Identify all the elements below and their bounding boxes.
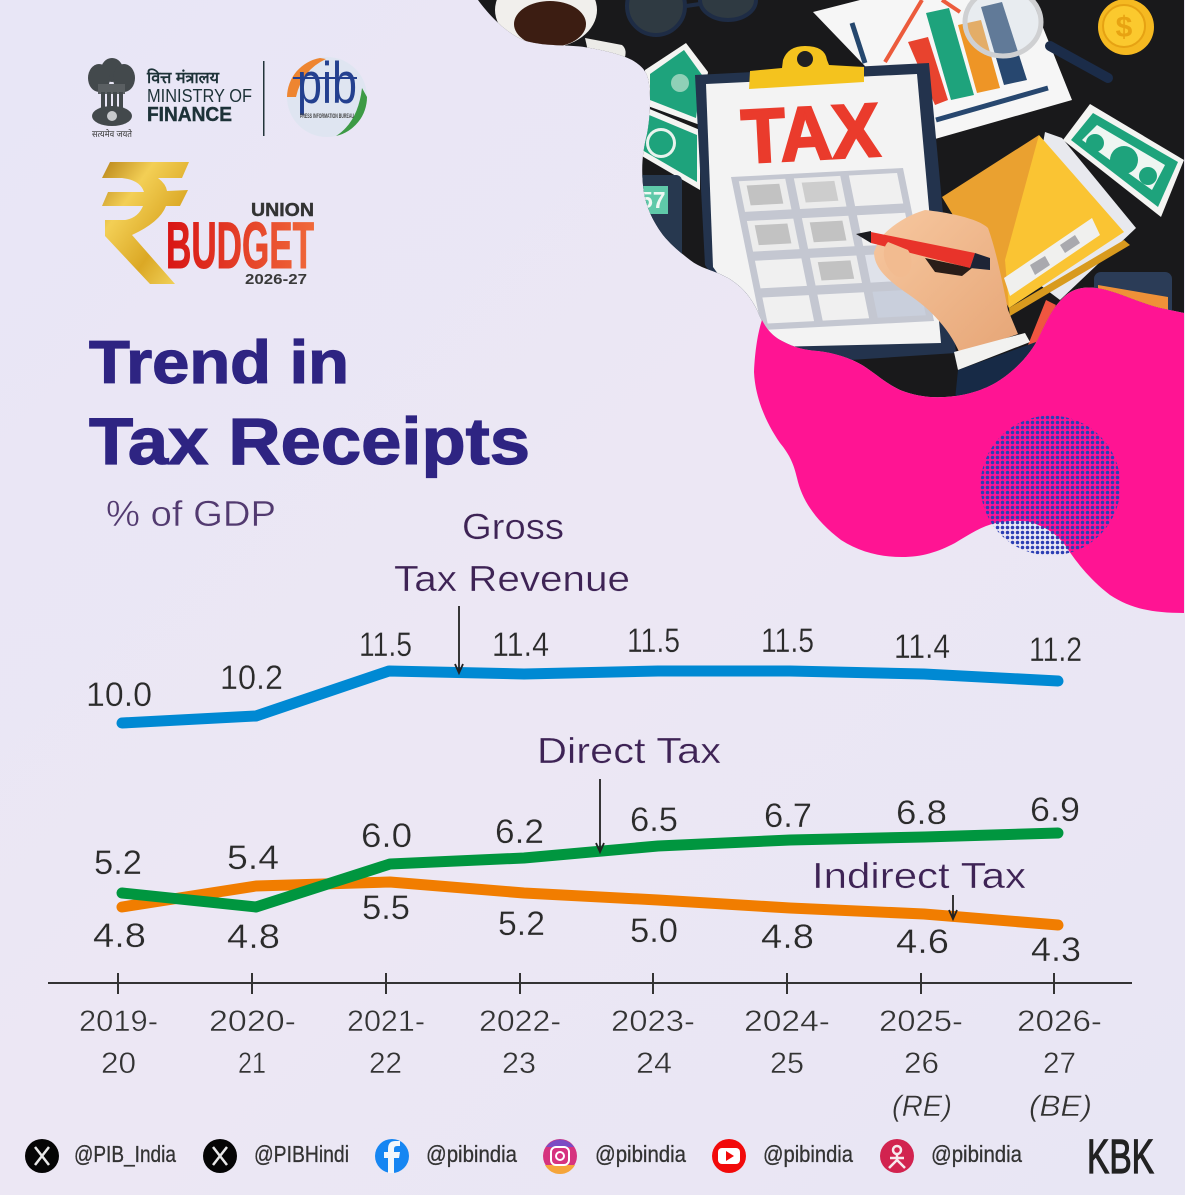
handle: pibindia YouTube: @pibindia bbox=[763, 1141, 853, 1167]
icon: glasses bbox=[627, 0, 756, 35]
gross tax revenue values: 11.2 bbox=[1029, 631, 1082, 669]
gross tax revenue values: 11.5 bbox=[359, 626, 412, 664]
label: gross tax revenue: Gross bbox=[462, 506, 564, 547]
title: Trend in bbox=[89, 329, 349, 396]
logo: ministry text: वित्त मंत्रालय bbox=[146, 68, 220, 87]
year labels: 20 bbox=[101, 1047, 136, 1080]
year labels: 25 bbox=[770, 1047, 804, 1080]
direct tax values: 6.0 bbox=[361, 817, 412, 855]
icon: X bbox=[25, 1139, 59, 1173]
direct tax values: 6.5 bbox=[630, 801, 678, 839]
logo: ministry text: MINISTRY OF bbox=[147, 86, 252, 106]
indirect tax values: 5.5 bbox=[362, 889, 410, 927]
indirect tax values: 5.2 bbox=[498, 905, 545, 943]
series: direct tax bbox=[122, 833, 1058, 907]
indirect tax values: 4.3 bbox=[1031, 931, 1081, 969]
logo: Union Budget bbox=[102, 162, 314, 288]
panel: clipboard bbox=[695, 46, 956, 362]
gross tax revenue values: 11.5 bbox=[761, 622, 814, 660]
halftone circle bbox=[980, 416, 1120, 556]
footer: social handles bbox=[25, 1139, 1022, 1174]
icon: gold coin bbox=[1098, 0, 1154, 55]
year labels bbox=[79, 1005, 1102, 1123]
handle: PIB_India: @PIB_India bbox=[74, 1141, 176, 1167]
logo: PIB: pib bbox=[297, 51, 357, 116]
TAX word: TAX bbox=[739, 88, 882, 180]
label: indirect tax: Indirect Tax bbox=[812, 855, 1026, 896]
year labels: 2022- bbox=[479, 1005, 561, 1038]
year labels: 23 bbox=[502, 1047, 536, 1080]
emblem lions bbox=[88, 58, 135, 126]
icon: chart paper bbox=[813, 0, 1072, 139]
gross tax revenue values: 11.5 bbox=[627, 622, 680, 660]
icon: banknote right bbox=[1063, 104, 1184, 217]
icon: calculator: 57 bbox=[640, 187, 666, 213]
year labels: 2026- bbox=[1017, 1005, 1102, 1038]
indirect tax values: 5.0 bbox=[630, 912, 678, 950]
logo: PIB: PRESS INFORMATION BUREAU bbox=[300, 114, 354, 120]
icon: Koo-style app bbox=[880, 1139, 914, 1173]
label: gross tax revenue bbox=[394, 506, 630, 599]
KBK mark: KBK bbox=[1087, 1131, 1154, 1184]
logo: Union Budget: BUDGET bbox=[166, 208, 314, 282]
series: gross tax revenue bbox=[122, 671, 1058, 723]
year labels: 2025- bbox=[879, 1005, 963, 1038]
gross tax revenue values bbox=[86, 622, 1082, 714]
label: direct tax: Direct Tax bbox=[537, 730, 721, 771]
form grid bbox=[731, 168, 934, 330]
year labels: 27 bbox=[1043, 1047, 1076, 1080]
direct tax values: 5.4 bbox=[227, 839, 279, 877]
pink blob bbox=[754, 287, 1184, 613]
year labels: 2021- bbox=[347, 1005, 425, 1038]
icon: coffee mug bbox=[495, 0, 626, 60]
direct tax values: 6.2 bbox=[495, 813, 544, 851]
icon: suit sleeve bbox=[954, 333, 1036, 400]
icon: X Hindi bbox=[203, 1139, 237, 1173]
icon: gold coin: $ bbox=[1116, 11, 1133, 44]
arrow: direct tax bbox=[596, 779, 604, 852]
year labels: 2023- bbox=[611, 1005, 695, 1038]
year labels: 22 bbox=[369, 1047, 402, 1080]
gross tax revenue values: 10.2 bbox=[220, 659, 283, 697]
logo: Union Budget: UNION bbox=[251, 200, 314, 220]
year labels: 2019- bbox=[79, 1005, 158, 1038]
direct tax values: 6.7 bbox=[764, 797, 812, 835]
indirect tax values: 4.8 bbox=[93, 917, 146, 955]
direct tax values bbox=[94, 791, 1080, 882]
indirect tax values: 4.8 bbox=[227, 918, 280, 956]
subtitle: % of GDP bbox=[106, 493, 276, 534]
year labels: 26 bbox=[904, 1047, 939, 1080]
icon: YouTube bbox=[712, 1139, 746, 1173]
logo: ministry text: FINANCE bbox=[147, 104, 232, 126]
icon: folder bbox=[942, 132, 1136, 316]
arrow: gross tax revenue bbox=[455, 606, 463, 673]
axis bbox=[48, 973, 1132, 994]
icon: banknotes left bbox=[640, 43, 708, 190]
title: Tax Receipts bbox=[89, 404, 530, 478]
icon: pencil bbox=[1028, 300, 1056, 348]
year labels: (RE) bbox=[892, 1090, 952, 1123]
icon: gold rupee bbox=[102, 162, 189, 284]
indirect tax values: 4.6 bbox=[896, 923, 949, 961]
handle: pibindia Facebook: @pibindia bbox=[426, 1141, 517, 1167]
gross tax revenue values: 11.4 bbox=[492, 626, 549, 664]
year labels: 24 bbox=[636, 1047, 672, 1080]
emblem motto: सत्यमेव जयते bbox=[92, 128, 133, 139]
handle: pibindia Instagram: @pibindia bbox=[595, 1141, 686, 1167]
label: gross tax revenue: Tax Revenue bbox=[394, 558, 630, 599]
logo: ministry text bbox=[146, 68, 252, 126]
handle: PIBHindi: @PIBHindi bbox=[254, 1141, 349, 1167]
icon: gold clip bbox=[749, 46, 864, 89]
indirect tax values: 4.8 bbox=[761, 918, 814, 956]
icon: Instagram bbox=[543, 1139, 577, 1174]
icon: Facebook bbox=[375, 1139, 409, 1173]
direct tax values: 5.2 bbox=[94, 844, 142, 882]
year labels: (BE) bbox=[1029, 1090, 1092, 1123]
direct tax values: 6.9 bbox=[1030, 791, 1080, 829]
logo: Union Budget: 2026-27 bbox=[245, 271, 307, 288]
year labels: 2020- bbox=[209, 1005, 296, 1038]
direct tax values: 6.8 bbox=[896, 794, 947, 832]
arrow: indirect tax bbox=[949, 895, 957, 919]
handle: pibindia app: @pibindia bbox=[931, 1141, 1022, 1167]
logo: national emblem bbox=[88, 58, 135, 139]
gross tax revenue values: 11.4 bbox=[894, 628, 950, 666]
line chart bbox=[48, 506, 1132, 1123]
gross tax revenue values: 10.0 bbox=[86, 676, 152, 714]
icon: hand with pen bbox=[856, 210, 1018, 354]
title bbox=[89, 329, 530, 478]
photo illustration: tax clipboard on desk bbox=[470, 0, 1185, 400]
series: indirect tax bbox=[122, 882, 1058, 925]
year labels: 2024- bbox=[744, 1005, 830, 1038]
icon: magnifying glass bbox=[965, 0, 1108, 78]
icon: phone bbox=[1094, 272, 1172, 310]
logo: PIB bbox=[287, 51, 367, 137]
icon: calculator bbox=[642, 175, 682, 254]
year labels: 21 bbox=[238, 1047, 266, 1080]
indirect tax values bbox=[93, 889, 1081, 969]
